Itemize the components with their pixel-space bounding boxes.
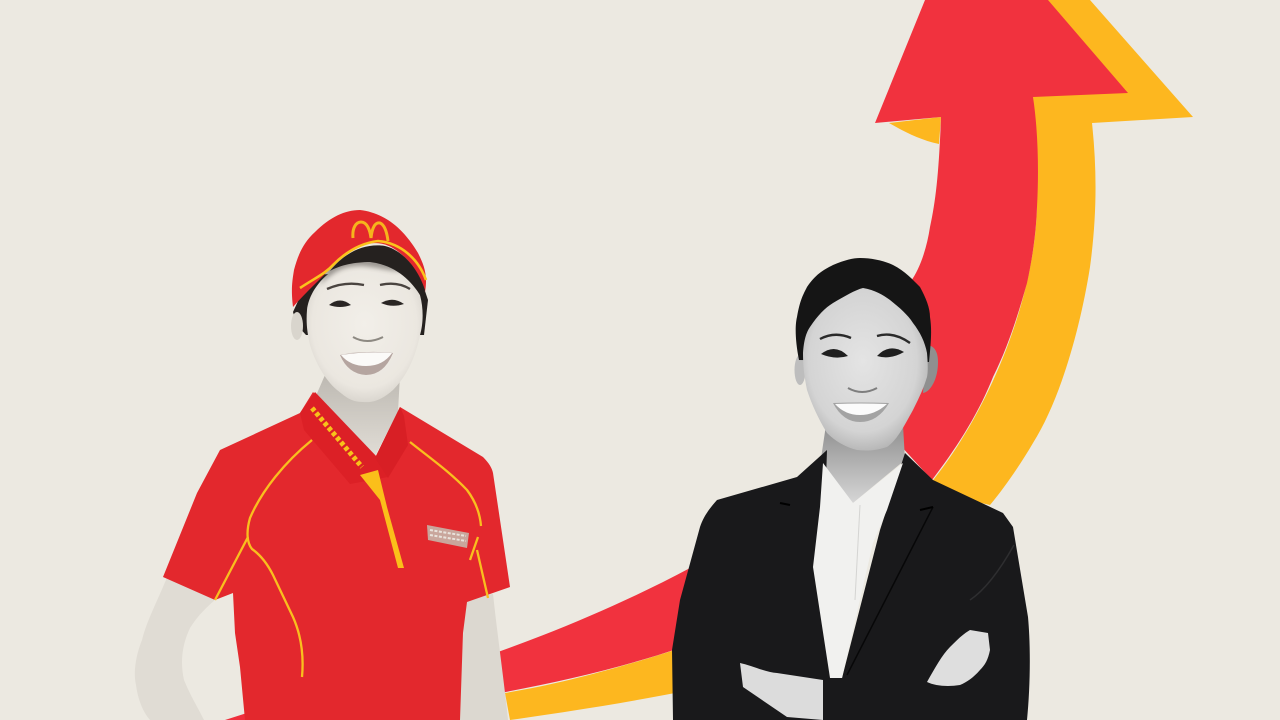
name badge: [427, 525, 469, 548]
red cap: [292, 210, 426, 307]
placket: [360, 470, 404, 568]
woman in red uniform: [135, 210, 510, 720]
smile: [833, 402, 889, 422]
woman in black suit: [672, 258, 1030, 720]
ears: [923, 345, 938, 393]
arrow red band: [225, 712, 250, 720]
smile: [340, 352, 393, 375]
nose: [353, 337, 383, 341]
red polo shirt: [163, 392, 510, 720]
collar dots: [312, 408, 362, 467]
head: [794, 258, 938, 451]
head: [291, 256, 428, 402]
hair: [293, 270, 428, 335]
brows and eyes: [820, 335, 851, 339]
arrow yellow band: [505, 645, 690, 720]
crossed hands: [740, 630, 990, 720]
face: [307, 260, 423, 402]
black blazer: [672, 450, 1030, 720]
cap logo: [353, 222, 388, 241]
brows and eyes: [327, 284, 364, 289]
arms: [135, 575, 508, 720]
growth arrow: [225, 0, 1193, 720]
hair: [796, 258, 931, 362]
face: [803, 288, 928, 451]
white shirt: [813, 463, 903, 678]
neck: [315, 375, 400, 460]
piping: [215, 440, 488, 677]
neck: [820, 425, 905, 503]
nose: [848, 388, 877, 392]
